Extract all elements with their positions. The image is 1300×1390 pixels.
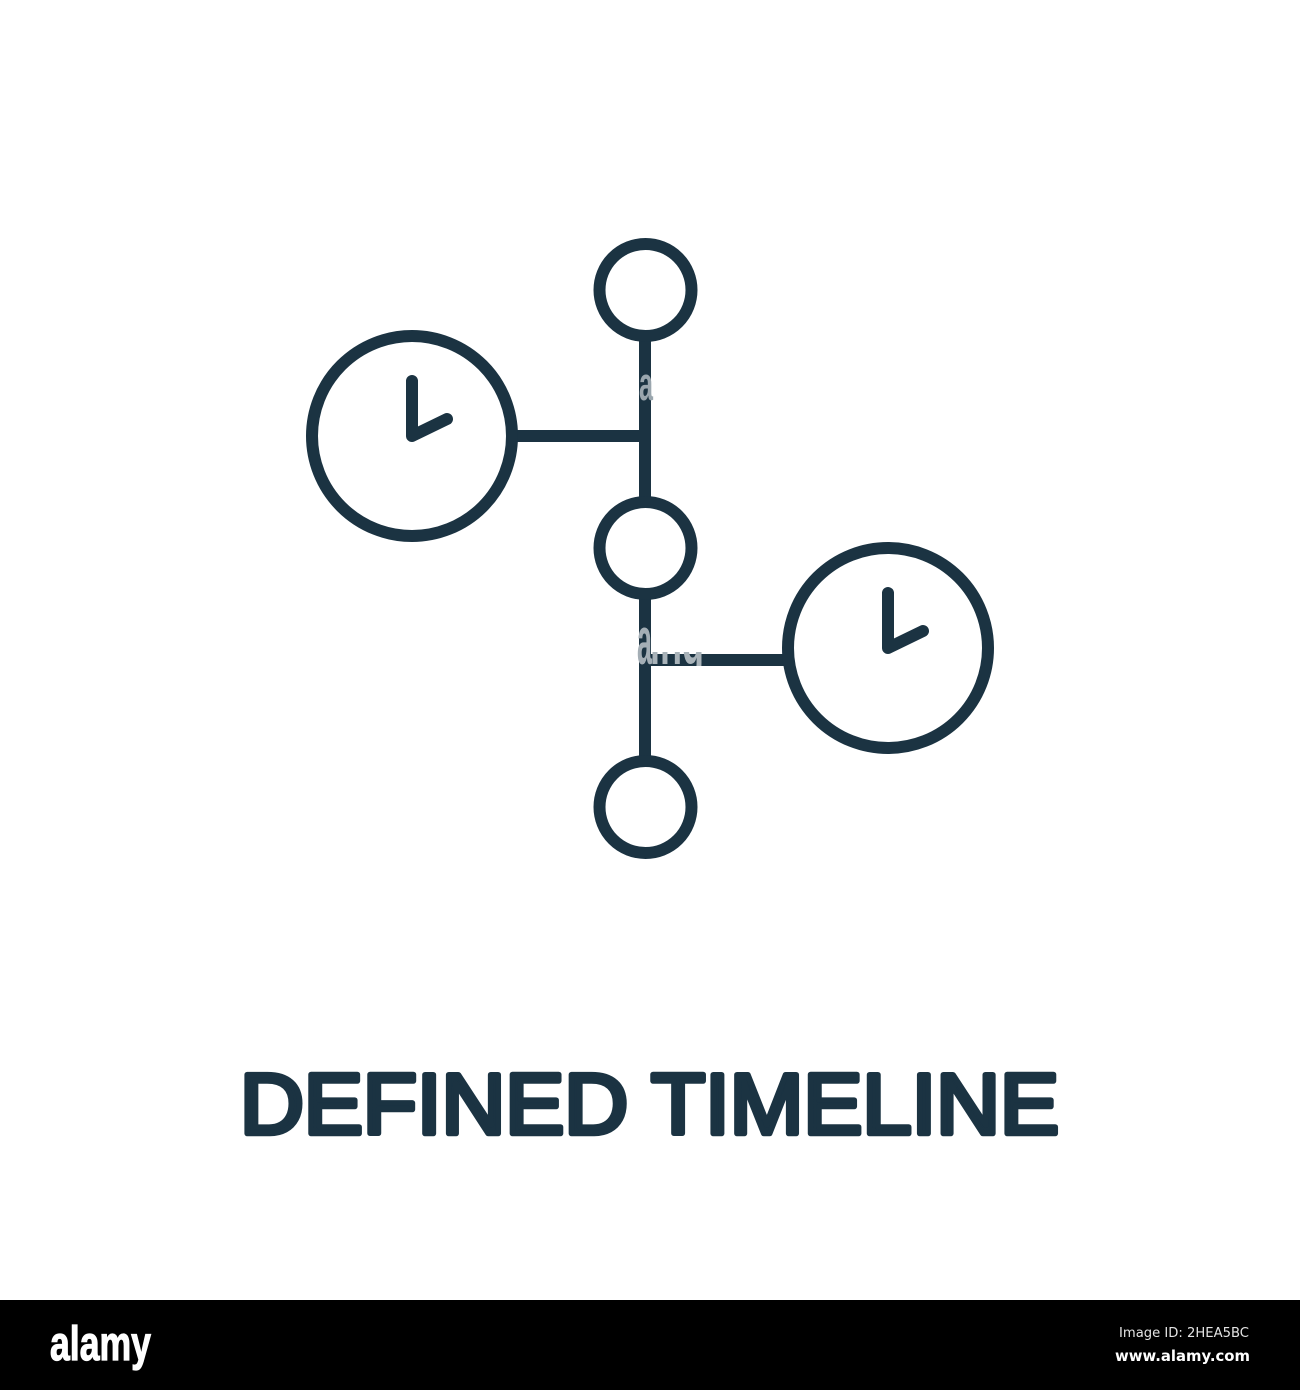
- text: a: [637, 603, 652, 679]
- icon: left clock: [312, 336, 512, 536]
- title: DEFINED TIMELINE: [240, 1057, 1059, 1152]
- icon: defined timeline: [312, 244, 988, 853]
- timeline spine upper: [639, 336, 651, 502]
- connector: right clock: [645, 654, 788, 666]
- website: www.alamy.com: [1115, 1347, 1250, 1365]
- watermark fragment: lower band: ing: [650, 603, 704, 679]
- footer bar: [0, 1300, 1300, 1390]
- footer logo: alamy: [50, 1318, 151, 1371]
- icon: right clock: [788, 548, 988, 748]
- timeline node: middle: [600, 502, 692, 594]
- timeline node: top: [600, 244, 692, 336]
- connector: left clock: [512, 430, 645, 442]
- timeline spine lower: [639, 594, 651, 761]
- image id: Image ID: 2HEA5BC: [1119, 1326, 1249, 1341]
- timeline node: bottom: [600, 761, 692, 853]
- watermark fragment: upper: a: [639, 357, 653, 410]
